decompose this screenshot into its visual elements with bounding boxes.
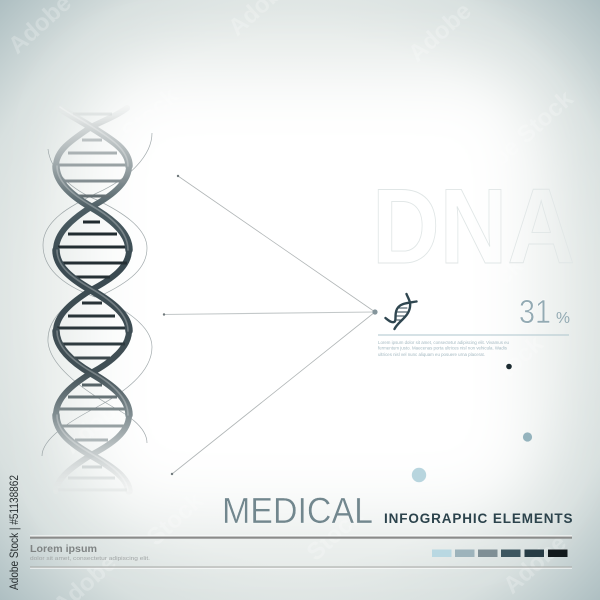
footer text: Lorem ipsum xyxy=(30,543,97,555)
footer rules xyxy=(30,536,572,569)
DNA outline title: DNA xyxy=(372,166,575,286)
stock watermarks: Stock xyxy=(462,252,529,316)
divider under stat xyxy=(378,334,569,336)
helix front strand xyxy=(56,108,129,491)
DNA helix xyxy=(56,107,129,491)
helix back strand xyxy=(56,108,129,491)
stock watermarks: Stock xyxy=(142,487,209,551)
stock watermarks: Adobe xyxy=(58,389,132,459)
stock watermarks: Stock xyxy=(302,502,369,566)
stock watermarks: Adobe xyxy=(498,529,572,599)
helix highlight xyxy=(57,107,128,491)
stock watermarks: Stock xyxy=(117,82,184,146)
stock id label: Adobe Stock | #51138862 xyxy=(7,475,21,590)
percentage stat: % xyxy=(556,310,570,327)
stock watermarks: Adobe Stock xyxy=(451,85,579,204)
helix base-pair rungs xyxy=(57,114,128,490)
icon: small dna xyxy=(386,294,416,329)
footer text xyxy=(30,543,151,562)
decorative dots xyxy=(412,364,532,482)
body text xyxy=(378,340,510,357)
thin orbit curves around helix xyxy=(42,133,152,456)
footer text: dolor sit amet, consectetur adipiscing elit. xyxy=(30,556,151,562)
stock watermarks: Adobe Stock xyxy=(216,135,344,254)
body text: ultrices nisl vel nunc aliquam eu posuere urna placerat. xyxy=(378,352,485,357)
connector lines xyxy=(163,175,378,475)
stock watermarks: Adobe Stock xyxy=(271,300,399,419)
subheading: INFOGRAPHIC ELEMENTS xyxy=(384,511,572,526)
percentage stat: 31 xyxy=(519,293,551,330)
colour swatches xyxy=(432,550,568,557)
body text: fermentum justo. Maecenas porta ultrices nisl non vehicula. Wadis xyxy=(378,346,507,350)
body text: Lorem ipsum dolor sit amet, consectetur adipiscing elit. Vivamus eu xyxy=(378,340,510,345)
heading: medical: MEDICAL xyxy=(222,490,373,531)
stock watermarks: Adobe Stock xyxy=(421,330,549,449)
